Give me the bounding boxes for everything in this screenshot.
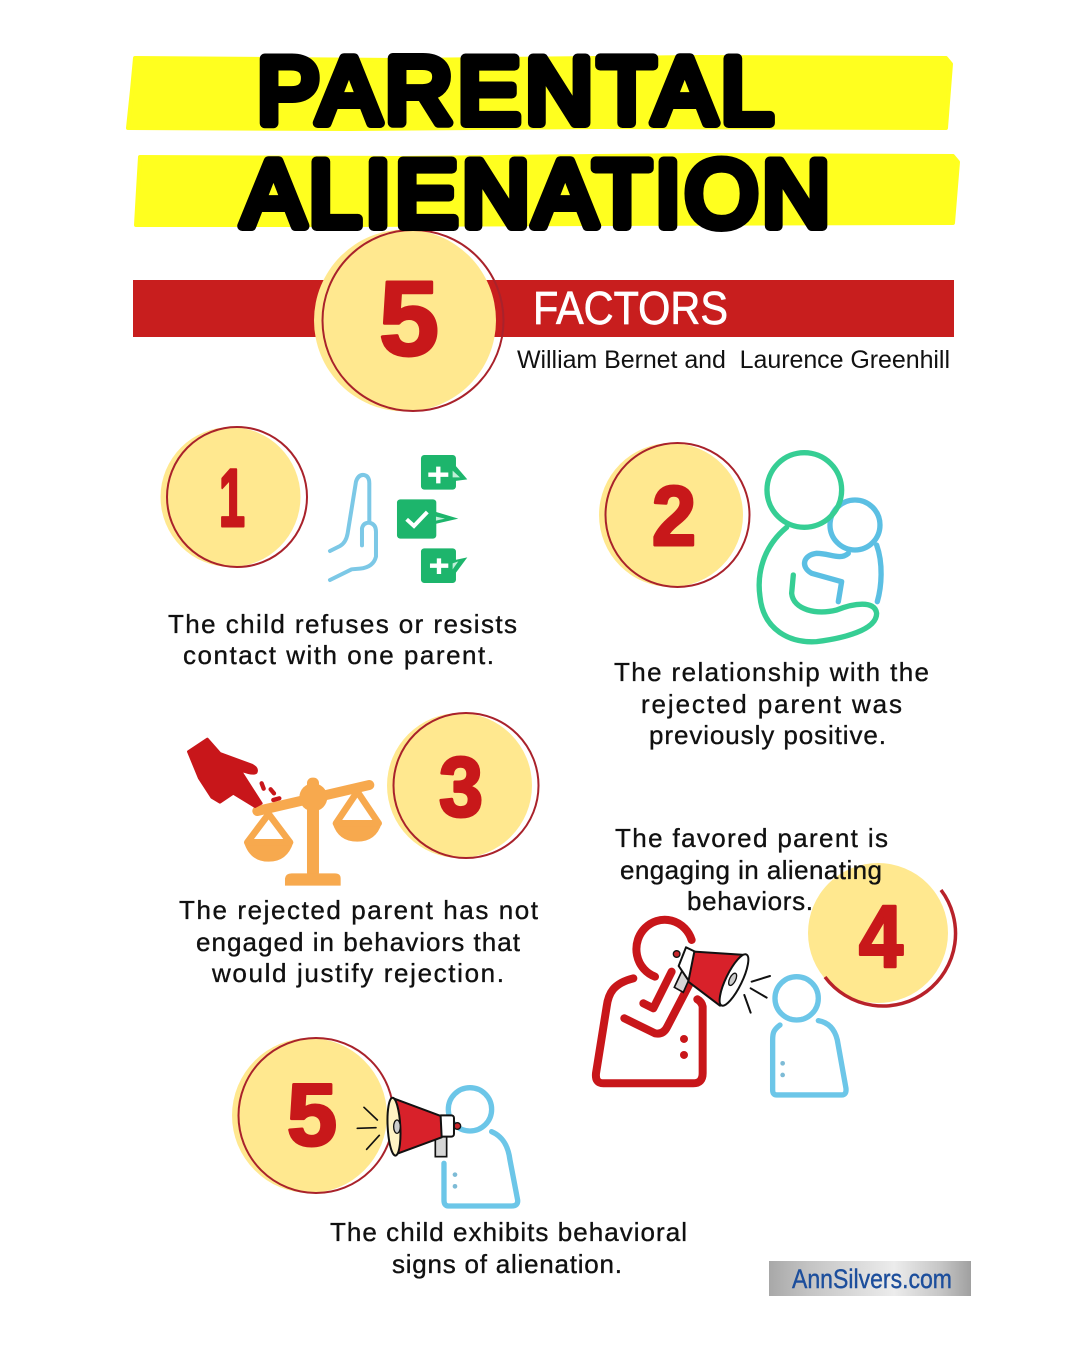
icon: pointing hand	[188, 739, 279, 807]
text: factor 3 description	[179, 895, 539, 988]
text: factor 5 description: signs of alienation.	[392, 1249, 622, 1279]
text: factor 2 description	[614, 657, 929, 750]
panel: factor 5	[232, 1038, 687, 1279]
text: factor 5 description: The child exhibits behavioral	[330, 1217, 687, 1247]
highlight: title background strokes	[128, 57, 958, 225]
panel: factor 4	[596, 823, 956, 1095]
badge: number 2	[599, 443, 750, 587]
text: factor 4 description: behaviors.	[687, 886, 813, 916]
badge: number 1: 1	[219, 453, 245, 544]
text: factor 2 description: The relationship with the	[614, 657, 929, 687]
badge: number 5: 5	[287, 1065, 337, 1164]
text: factor 3 description: would justify rejection.	[211, 958, 504, 988]
text: factor 1 description	[168, 609, 517, 670]
text: factor 4 description: The favored parent is	[615, 823, 888, 853]
icon: green message bubbles	[397, 455, 467, 583]
banner: red factors bar	[133, 280, 954, 337]
title	[242, 38, 830, 246]
title: ALIENATION	[242, 141, 830, 246]
text: factor 5 description	[330, 1217, 687, 1279]
icon: speaking parent with megaphone	[596, 920, 770, 1083]
badge: number 4	[808, 863, 956, 1006]
icon: child with megaphone	[357, 1088, 518, 1206]
icon: tilted scales	[244, 778, 382, 886]
text: factor 1 description: contact with one parent.	[183, 640, 494, 670]
badge: big number 5	[314, 230, 504, 412]
icon: listening child	[773, 977, 846, 1095]
text: factor 3 description: engaged in behaviors that	[196, 927, 521, 957]
text: factor 1 description: The child refuses or resists	[168, 609, 517, 639]
panel: factor 3	[179, 713, 539, 988]
badge: number 3: 3	[439, 740, 483, 834]
badge: number 4: 4	[859, 887, 903, 986]
text: factor 4 description	[615, 823, 888, 916]
badge: number 1	[160, 427, 307, 567]
text: factor 2 description: rejected parent was	[641, 689, 902, 719]
icon: raised hand	[330, 475, 376, 580]
text: factor 3 description: The rejected parent has not	[179, 895, 539, 925]
heading: factors: FACTORS	[533, 282, 728, 334]
title: PARENTAL	[257, 38, 773, 143]
text: authors: William Bernet and Laurence Greenhill	[517, 346, 950, 374]
text: factor 2 description: previously positive.	[649, 720, 886, 750]
badge: number 5	[232, 1038, 394, 1193]
panel: factor 2	[599, 443, 929, 750]
panel: factor 1	[160, 427, 517, 670]
badge: number 3	[387, 713, 538, 858]
badge: number 2: 2	[652, 469, 696, 563]
text: factor 4 description: engaging in alienating	[620, 855, 882, 885]
icon: parent holding child	[759, 453, 881, 642]
badge: big number 5: 5	[379, 260, 439, 378]
logo: AnnSilvers.com: AnnSilvers.com	[792, 1264, 952, 1294]
